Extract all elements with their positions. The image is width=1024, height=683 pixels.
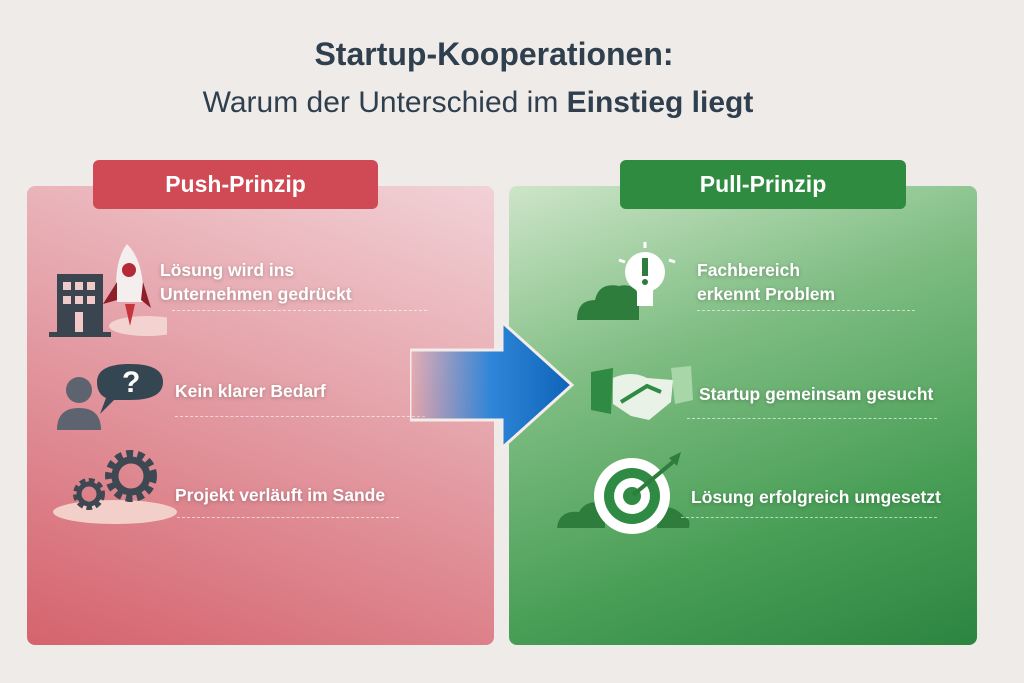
text: push 1: Unternehmen gedrückt [160,284,352,304]
text: pull 1 [696,260,836,304]
icon: target [557,452,690,534]
header: pull [620,160,906,209]
subtitle: Warum der Unterschied im Einstieg liegt [203,86,753,119]
text: push 1 [159,260,352,306]
arrow [410,326,574,444]
icon: question bubble [57,364,163,430]
title: Startup-Kooperationen: [314,36,674,72]
header: push: Push-Prinzip [165,171,306,197]
icon: question bubble: ? [122,366,140,399]
text: pull 3: Lösung erfolgreich umgesetzt [691,487,941,507]
header: pull: Pull-Prinzip [700,171,826,197]
text: pull 2: Startup gemeinsam gesucht [699,384,933,404]
text: pull 1: Fachbereich [697,260,800,280]
icon: light bulb [577,242,676,320]
panel: pull [509,186,977,645]
icon: handshake [591,366,693,420]
text: push 1: Lösung wird ins [160,260,294,280]
icon: building with rocket [49,244,167,337]
panel: push [27,186,494,645]
icon: gears in sand [53,450,177,524]
text: push 2: Kein klarer Bedarf [175,381,326,401]
header: push [93,160,378,209]
text: pull 1: erkennt Problem [697,284,835,304]
text: push 3: Projekt verläuft im Sande [175,485,385,505]
